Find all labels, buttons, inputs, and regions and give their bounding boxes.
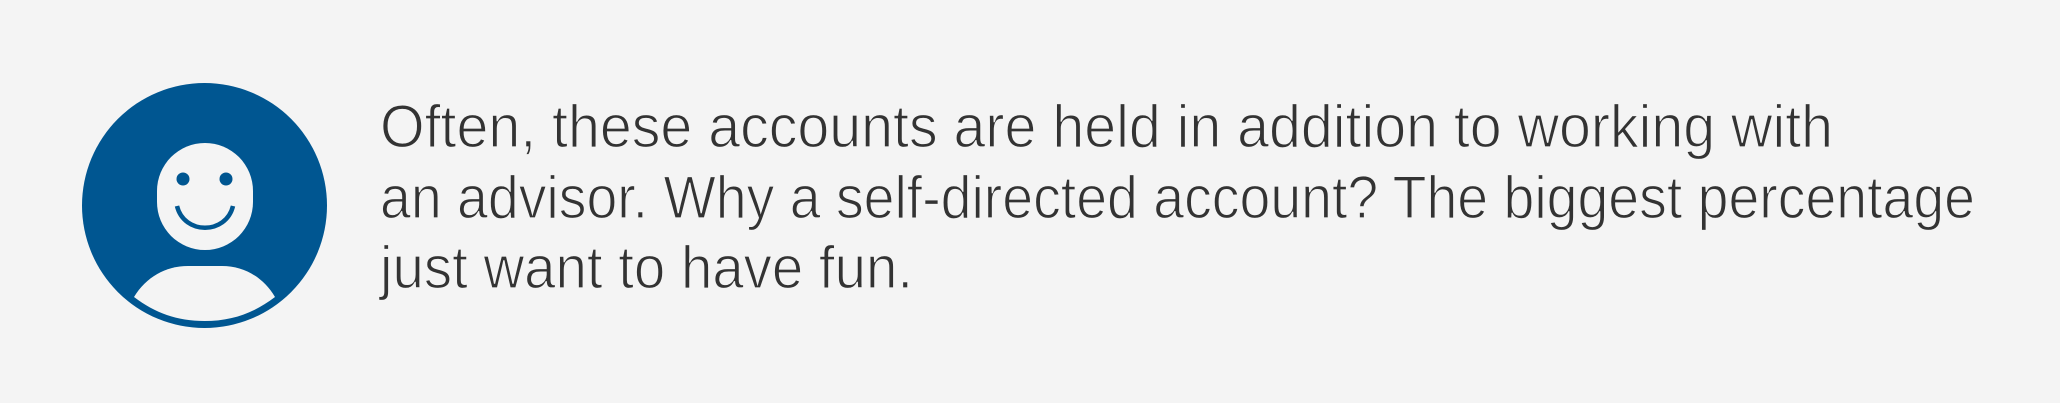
text block: body copy: just want to have fun. [378,234,913,301]
text block: body copy [378,93,1975,301]
text block: body copy: Often, these accounts are held in addition to working with [380,93,1833,160]
text block: body copy: an advisor. Why a self-directed account? The biggest percentage [380,164,1975,231]
icon: smiling person in blue circle [82,83,327,328]
